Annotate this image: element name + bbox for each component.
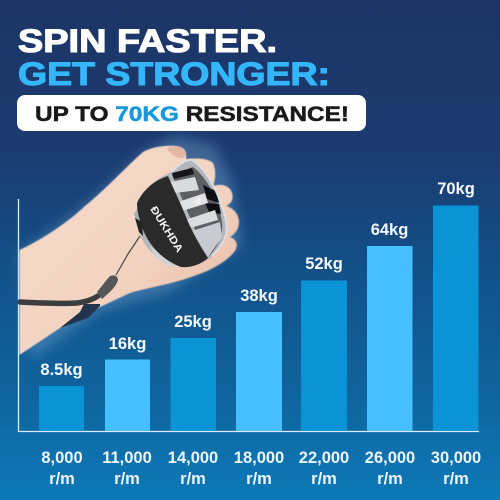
- x-axis label: 14,000 r/m: 14,000: [168, 449, 218, 467]
- bar: 8,000 r/m 8.5kg: 8.5kg: [40, 361, 83, 379]
- gyro black band: [137, 176, 208, 267]
- x-axis label: 22,000 r/m: 22,000: [299, 449, 349, 467]
- lanyard thin cord: [116, 236, 140, 275]
- x-axis label: 8,000 r/m: 8,000: [41, 449, 83, 467]
- bar: 30,000 r/m 70kg: 70kg: [437, 180, 475, 198]
- bar: 30,000 r/m 70kg: [433, 180, 478, 431]
- x-axis label: 22,000 r/m: r/m: [311, 470, 337, 488]
- bar: 18,000 r/m 38kg: [236, 287, 282, 431]
- bar: 14,000 r/m 25kg: 25kg: [174, 313, 212, 331]
- chart: resistance by speed: [18, 180, 481, 488]
- chart axes: [18, 199, 479, 432]
- bar: 26,000 r/m 64kg: 64kg: [371, 221, 408, 239]
- title: line 1: SPIN FASTER.: [18, 23, 277, 59]
- gyro rotor interior: [172, 167, 222, 257]
- illustration: hand holding gyro ball: [20, 136, 242, 360]
- x-axis label: 30,000 r/m: r/m: [443, 470, 469, 488]
- hand glow: [20, 136, 242, 360]
- bar: 22,000 r/m 52kg: [301, 255, 347, 431]
- x-axis label: 18,000 r/m: 18,000: [234, 449, 284, 467]
- bar: 18,000 r/m 38kg: 38kg: [240, 287, 278, 305]
- brand logo on band: ÐUKHDA: [147, 204, 185, 255]
- banner: resistance callout: [17, 95, 366, 131]
- bar: 14,000 r/m 25kg: [170, 313, 216, 431]
- bar: 8,000 r/m 8.5kg: [39, 361, 84, 431]
- gyro rotor stripes: [134, 168, 222, 266]
- x-axis label: 11,000 r/m: 11,000: [102, 449, 152, 467]
- x-axis label: 8,000 r/m: r/m: [49, 470, 75, 488]
- lanyard cord: [20, 296, 98, 303]
- bar: 11,000 r/m 16kg: [105, 335, 150, 431]
- banner: resistance callout: UP TO 70KG RESISTANCE!: [35, 103, 349, 126]
- gyro ball shell: [137, 160, 227, 267]
- bar: 22,000 r/m 52kg: 52kg: [305, 255, 343, 273]
- x-axis label: 11,000 r/m: r/m: [114, 470, 140, 488]
- x-axis label: 26,000 r/m: r/m: [377, 470, 403, 488]
- gyro clear ring: [172, 160, 227, 256]
- x-axis label: 18,000 r/m: r/m: [246, 470, 272, 488]
- fingernail: [167, 147, 185, 158]
- lanyard clip: [97, 275, 118, 299]
- title: line 2: GET STRONGER:: [18, 56, 330, 92]
- lanyard shadow strap: [60, 304, 100, 328]
- x-axis label: 26,000 r/m: 26,000: [365, 449, 415, 467]
- x-axis label: 14,000 r/m: r/m: [180, 470, 206, 488]
- hand: [20, 146, 239, 355]
- bar: 11,000 r/m 16kg: 16kg: [109, 335, 146, 353]
- bar: 26,000 r/m 64kg: [367, 221, 412, 431]
- x-axis label: 30,000 r/m: 30,000: [431, 449, 481, 467]
